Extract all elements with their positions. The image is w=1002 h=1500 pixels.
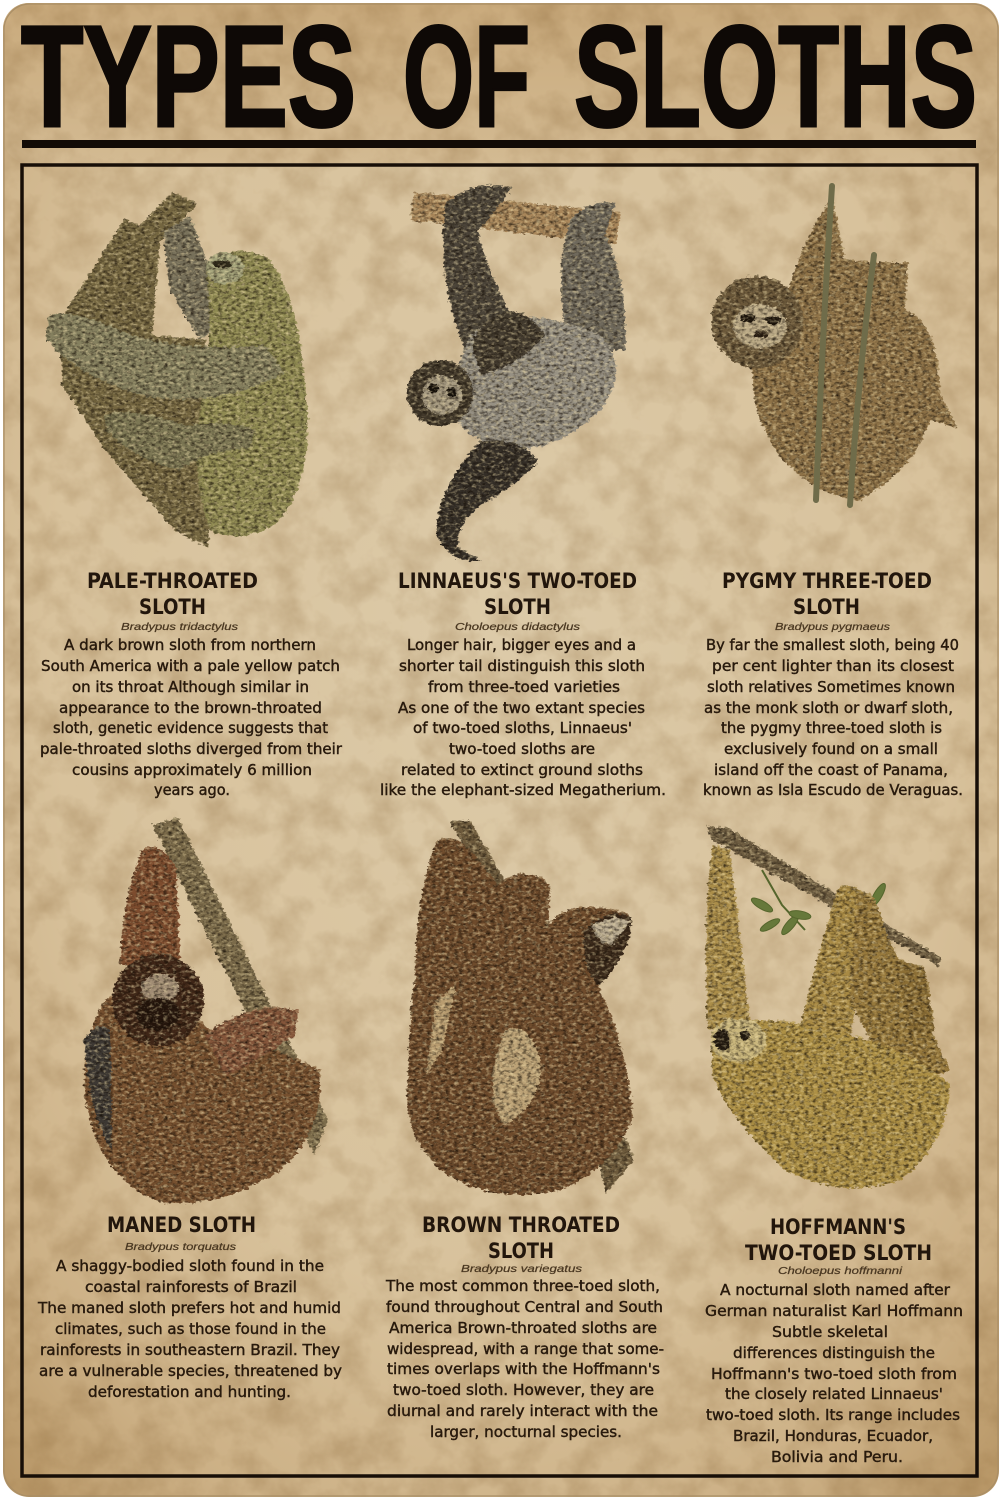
description: Hoffmann's two-toed sloth from	[711, 1365, 957, 1383]
species name: Choloepus hoffmanni	[778, 1266, 903, 1277]
description: A shaggy-bodied sloth found in the	[56, 1257, 324, 1275]
description: By far the smallest sloth, being 40	[706, 636, 959, 654]
species name: Bradypus pygmaeus	[775, 622, 890, 633]
icon: leaves on a twig	[750, 870, 888, 937]
description: are a vulnerable species, threatened by	[39, 1362, 342, 1380]
title: OF	[403, 0, 530, 157]
description: widespread, with a range that some-	[387, 1340, 664, 1358]
description: Bolivia and Peru.	[771, 1448, 903, 1466]
description	[380, 636, 666, 799]
description: known as Isla Escudo de Veraguas.	[703, 781, 963, 799]
description: Longer hair, bigger eyes and a	[407, 636, 636, 654]
description: two-toed sloth. Its range includes	[706, 1406, 960, 1424]
description: South America with a pale yellow patch	[41, 657, 340, 675]
illustration: Hoffmann's sloth on a branch	[706, 826, 950, 1188]
description: The maned sloth prefers hot and humid	[37, 1299, 341, 1317]
description: climates, such as those found in the	[55, 1320, 326, 1338]
description: on its throat Although similar in	[72, 678, 309, 696]
description: times overlaps with the Hoffmann's	[387, 1360, 660, 1378]
heading: SLOTH	[484, 595, 551, 619]
description: two-toed sloth. However, they are	[393, 1381, 654, 1399]
description: per cent lighter than its closest	[712, 657, 954, 675]
heading	[722, 569, 932, 619]
description: found throughout Central and South	[386, 1298, 663, 1316]
panel: Hoffmann's two-toed sloth	[705, 826, 963, 1466]
heading: SLOTH	[139, 595, 206, 619]
title rule	[22, 140, 976, 148]
heading: MANED SLOTH	[107, 1213, 256, 1237]
description: Subtle skeletal	[772, 1323, 888, 1341]
description	[705, 1281, 963, 1466]
description: diurnal and rarely interact with the	[387, 1402, 658, 1420]
heading: SLOTH	[793, 595, 860, 619]
description: the closely related Linnaeus'	[725, 1385, 943, 1403]
panel: pygmy three-toed sloth	[703, 186, 963, 799]
description: coastal rainforests of Brazil	[85, 1278, 297, 1296]
description: cousins approximately 6 million	[72, 761, 312, 779]
description: larger, nocturnal species.	[430, 1423, 622, 1441]
description: island off the coast of Panama,	[714, 761, 948, 779]
illustration: pygmy sloth on vines	[711, 198, 958, 500]
description: America Brown-throated sloths are	[389, 1319, 657, 1337]
description: A nocturnal sloth named after	[720, 1281, 951, 1299]
description: pale-throated sloths diverged from their	[40, 740, 343, 758]
description	[703, 636, 963, 799]
panel: brown throated sloth	[385, 820, 664, 1441]
description	[37, 1257, 342, 1401]
heading: LINNAEUS'S TWO-TOED	[398, 569, 637, 593]
description: the pygmy three-toed sloth is	[721, 719, 942, 737]
description: rainforests in southeastern Brazil. They	[40, 1341, 340, 1359]
heading: PALE-THROATED	[87, 569, 258, 593]
heading: SLOTH	[488, 1239, 554, 1263]
heading	[745, 1215, 932, 1265]
title	[21, 0, 977, 157]
title: TYPES	[21, 0, 356, 157]
species name: Bradypus torquatus	[125, 1242, 236, 1253]
species name: Bradypus tridactylus	[121, 622, 238, 633]
species name: Choloepus didactylus	[455, 622, 580, 633]
description: related to extinct ground sloths	[401, 761, 643, 779]
illustration: brown throated sloth with pale streaks	[407, 820, 634, 1194]
description: sloth, genetic evidence suggests that	[53, 719, 328, 737]
heading	[398, 569, 637, 619]
panel: pale-throated sloth	[40, 192, 343, 799]
description: from three-toed varieties	[428, 678, 620, 696]
heading: BROWN THROATED	[422, 1213, 620, 1237]
description: Brazil, Honduras, Ecuador,	[733, 1427, 933, 1445]
heading: TWO-TOED SLOTH	[745, 1241, 932, 1265]
icon: vines	[816, 186, 874, 505]
description: as the monk sloth or dwarf sloth,	[704, 699, 953, 717]
illustration: maned sloth on a diagonal branch	[84, 818, 328, 1203]
description: shorter tail distinguish this sloth	[399, 657, 645, 675]
description: A dark brown sloth from northern	[64, 636, 316, 654]
illustration: pale-throated sloth on a trunk	[46, 192, 308, 548]
heading	[87, 569, 258, 619]
description: differences distinguish the	[733, 1344, 935, 1362]
description: sloth relatives Sometimes known	[707, 678, 955, 696]
heading: HOFFMANN'S	[770, 1215, 906, 1239]
description: The most common three-toed sloth,	[385, 1277, 660, 1295]
description: As one of the two extant species	[398, 699, 645, 717]
description	[385, 1277, 664, 1441]
description: deforestation and hunting.	[88, 1383, 291, 1401]
illustration: Linnaeus's sloth with baby on a branch	[407, 185, 625, 561]
description	[40, 636, 343, 799]
panel: maned sloth	[37, 818, 342, 1401]
description: German naturalist Karl Hoffmann	[705, 1302, 963, 1320]
heading	[422, 1213, 620, 1263]
description: years ago.	[154, 781, 230, 799]
species name: Bradypus variegatus	[461, 1264, 582, 1275]
heading: PYGMY THREE-TOED	[722, 569, 932, 593]
description: appearance to the brown-throated	[59, 699, 322, 717]
description: like the elephant-sized Megatherium.	[380, 781, 666, 799]
description: of two-toed sloths, Linnaeus'	[413, 719, 632, 737]
description: exclusively found on a small	[724, 740, 938, 758]
panel: Linnaeus's two-toed sloth	[380, 185, 666, 799]
description: two-toed sloths are	[449, 740, 595, 758]
